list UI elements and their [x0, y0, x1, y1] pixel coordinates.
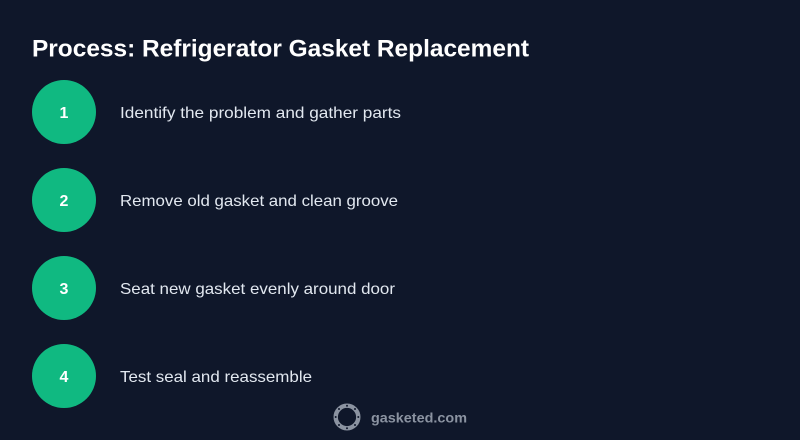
step 2: 2 — [60, 193, 69, 210]
brand logo and name — [335, 405, 467, 429]
step 3 — [32, 256, 396, 320]
step 3: 3 — [60, 281, 69, 298]
title: Process: Refrigerator Gasket Replacement — [32, 36, 529, 62]
step 1: 1 — [60, 105, 69, 122]
icon: gasket ring — [335, 405, 359, 429]
step 2: Remove old gasket and clean groove — [120, 193, 398, 210]
step 4 — [32, 344, 312, 408]
step 4: Test seal and reassemble — [120, 369, 312, 386]
step 1: Identify the problem and gather parts — [120, 105, 401, 122]
step 4: 4 — [60, 369, 69, 386]
step 1 — [32, 80, 401, 144]
step 2 — [32, 168, 398, 232]
step 3: Seat new gasket evenly around door — [120, 281, 396, 298]
brand name: gasketed.com — [371, 410, 467, 426]
